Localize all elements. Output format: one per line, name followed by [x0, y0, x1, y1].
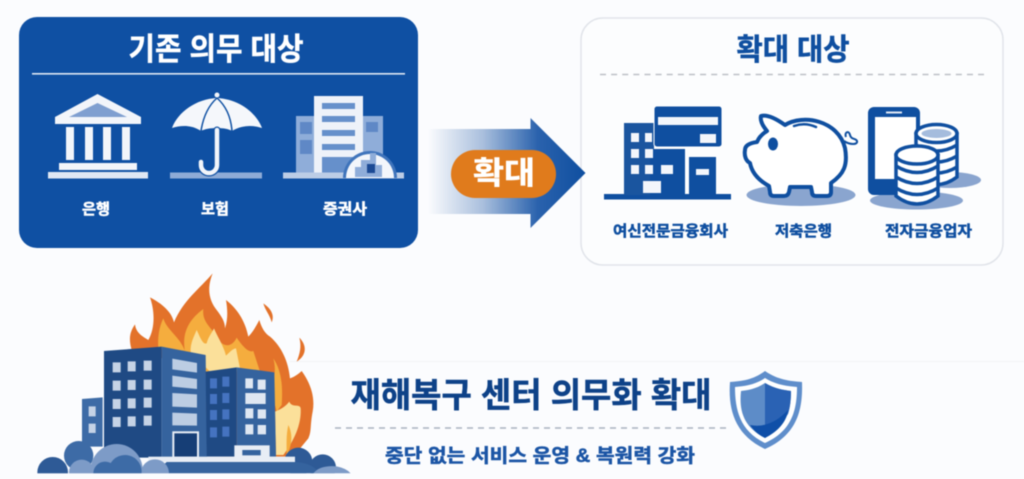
subheading: 중단 없는 서비스 운영 & 복원력 강화 [385, 445, 695, 467]
ground and bushes [20, 441, 373, 479]
badge: expand [451, 150, 556, 198]
label: specialized credit finance: 여신전문금융회사 [613, 223, 728, 240]
illustration: building on fire [20, 273, 373, 479]
badge: expand: 확대 [473, 156, 535, 191]
icon: card company building [604, 106, 731, 200]
label: bank: 은행 [82, 201, 110, 218]
icon: phone with coins [868, 107, 981, 210]
label: securities: 증권사 [323, 201, 367, 218]
right building [206, 367, 276, 457]
icon: shield [730, 371, 802, 449]
small rear building [82, 397, 103, 447]
heading: DR center mandate: 재해복구 센터 의무화 확대 [350, 377, 712, 415]
label: e-finance: 전자금융업자 [885, 223, 972, 240]
back coin stack [916, 124, 957, 184]
heading: existing targets: 기존 의무 대상 [128, 32, 304, 67]
front coin stack [896, 146, 938, 204]
panel: expansion targets [581, 18, 1003, 265]
callout: DR center expansion [335, 377, 726, 467]
main building [89, 347, 207, 458]
icon: umbrella [170, 92, 262, 178]
icon: bank [48, 94, 148, 178]
panel: existing obligated targets [19, 17, 418, 248]
arrow: expansion [428, 118, 586, 228]
heading: expansion targets: 확대 대상 [736, 34, 850, 67]
icon: piggy bank [745, 116, 857, 206]
icon: securities building [283, 96, 404, 178]
flames [130, 273, 313, 457]
label: insurance: 보험 [201, 201, 229, 218]
label: savings bank: 저축은행 [775, 223, 832, 240]
